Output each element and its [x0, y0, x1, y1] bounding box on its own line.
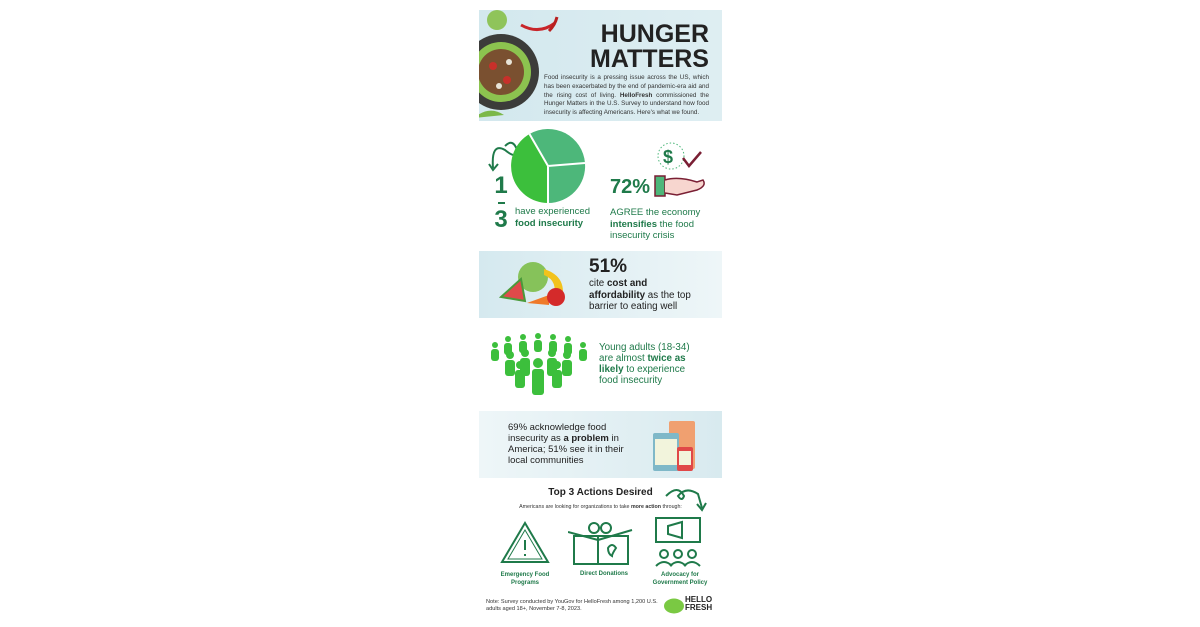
heading: top 3 actions: Top 3 Actions Desired	[548, 487, 653, 498]
stat: 72%	[610, 142, 705, 241]
label: donations: Direct Donations	[580, 571, 628, 577]
text: cost: cite cost and affordability as the top barrier to eating well	[589, 278, 691, 312]
icon: advocacy	[655, 517, 701, 567]
icon: fruits	[499, 262, 565, 306]
logo: hellofresh: HELLO	[685, 595, 712, 604]
arrow: curved	[665, 489, 707, 512]
icon: food bowl	[479, 10, 539, 118]
icon: donation box	[568, 522, 632, 565]
stat: 72%: $	[663, 147, 673, 167]
panel: cost barrier	[479, 251, 722, 318]
text: note: Note: Survey conducted by YouGov for HelloFresh among 1,200 U.S. adults aged 18+, November 7-8, 2023.	[486, 599, 658, 612]
icon: emergency	[500, 521, 550, 563]
text: economy: AGREE the economy intensifies the food insecurity crisis	[610, 207, 700, 241]
intro text: Food insecurity is a pressing issue across the US, which has been exacerbated by the end of pandemic-era aid and the rising cost of living. HelloFresh commissioned the Hunger Matters in the U.S. Survey to understand how food insecurity is affecting Americans. Here's what we found.	[544, 74, 709, 116]
panel: cost barrier: 51%	[589, 256, 627, 277]
chart: pie 1 in 3	[488, 129, 590, 233]
text: subtitle: Americans are looking for organizations to take more action through:	[519, 504, 682, 510]
text: food insecurity: have experienced food insecurity	[515, 206, 590, 229]
panel: problem in america	[479, 411, 722, 478]
stat: 72%: 72%	[610, 176, 650, 198]
number 1/3: 1 3	[494, 172, 508, 233]
logo: hellofresh: FRESH	[685, 603, 712, 612]
label: advocacy: Advocacy for Government Policy	[653, 572, 707, 586]
icon: cans	[653, 421, 695, 471]
icon: crowd	[491, 333, 587, 395]
text: 69%: 69% acknowledge food insecurity as a problem in America; 51% see it in their local communities	[508, 422, 624, 466]
text: young adults: Young adults (18-34) are almost twice as likely to experience food insecurity	[599, 342, 690, 386]
logo: hellofresh	[664, 595, 712, 614]
title: HUNGER MATTERS	[590, 20, 709, 73]
panel: header	[479, 10, 722, 121]
label: emergency: Emergency Food Programs	[501, 572, 549, 586]
